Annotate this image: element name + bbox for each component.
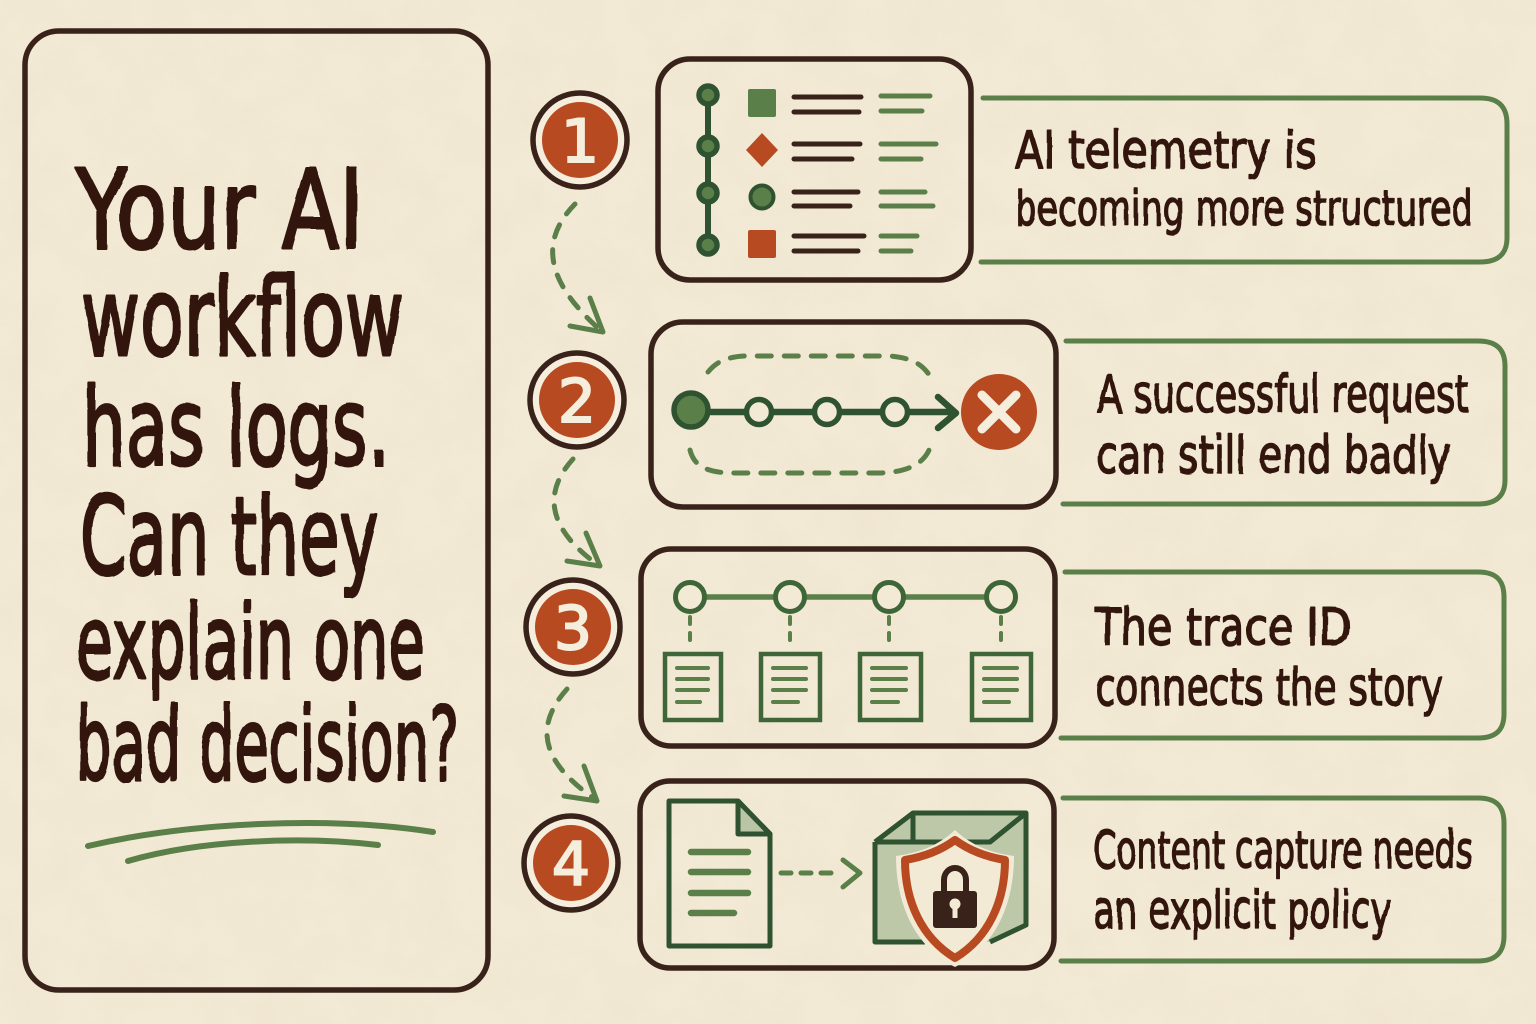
log lines green [881,96,936,251]
badge 2: 2 [558,367,596,437]
title [75,146,459,805]
icon: document [669,801,770,946]
callout 2 [1063,341,1505,504]
icon: storage box [875,813,1026,942]
arrow: step 1 to 2 [553,204,603,332]
log lines dark [794,97,864,251]
callout text 1: AI telemetry is [1015,121,1317,181]
badge 2 [530,353,624,447]
callout 4 [1061,798,1504,961]
arrow: document to vault [781,860,860,887]
callout text 2 [1096,365,1469,486]
panel: request path ends in failure [651,322,1056,507]
title: Your AI [75,146,364,274]
log documents [665,654,1031,720]
panel: structured telemetry [658,59,971,280]
trace line with nodes [676,582,1016,612]
icon: vertical timeline [699,86,717,254]
callout text 4 [1093,821,1473,941]
callout 1 [981,98,1507,262]
path with nodes and arrow [674,393,956,428]
icon: status shapes [746,89,778,258]
callout text 3 [1094,598,1443,718]
title underline [88,823,433,861]
panel: content capture policy [640,781,1054,968]
icon: failure X [961,374,1037,450]
dashed connectors [690,617,1001,648]
arrow: step 3 to 4 [547,689,597,801]
badge 1: 1 [561,107,599,177]
badge 3: 3 [554,594,592,664]
icon: shield with lock [896,830,1014,967]
title: has logs. [82,366,390,491]
arrow: step 2 to 3 [554,459,600,566]
panel: trace ID timeline [641,549,1055,746]
title: Can they [80,475,379,600]
dashed retry loop [690,356,932,473]
callout text 4: an explicit policy [1093,881,1391,941]
panel: title card [25,31,488,990]
title: explain one [76,584,425,703]
callout 3 [1061,572,1504,738]
title: workflow [81,256,404,381]
badge 3 [526,580,620,674]
callout text 1 [1015,121,1473,237]
badge 4 [524,816,618,910]
badge 4: 4 [552,830,590,900]
callout text 3: The trace ID [1094,598,1351,658]
title: bad decision? [76,686,459,805]
badge 1 [533,93,627,187]
